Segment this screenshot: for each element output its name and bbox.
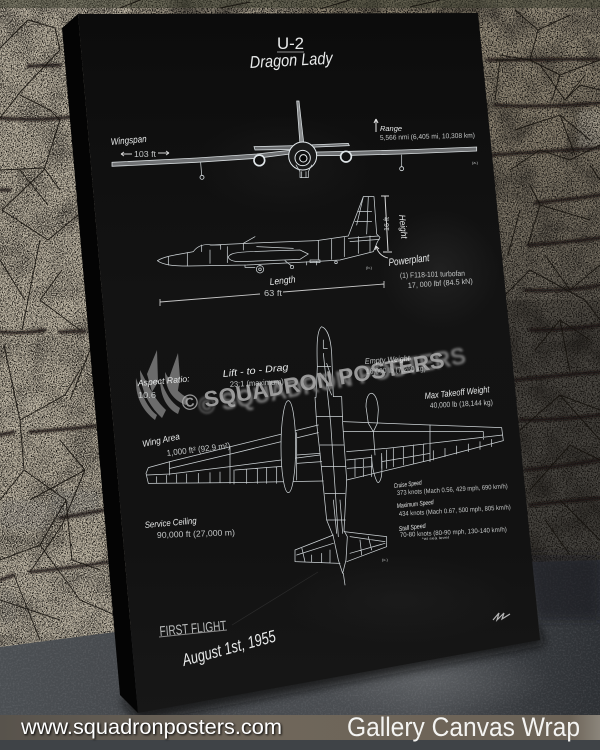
speed specs: 70-80 knots (80-90 mph, 130-140 km/h) [400, 526, 507, 539]
service ceiling spec: Service Ceiling [144, 515, 197, 530]
service ceiling spec: 90,000 ft (27,000 m) [157, 527, 235, 540]
figure labels: (a.) [472, 160, 479, 165]
aspect ratio spec: Aspect Ratio: [136, 373, 191, 388]
speed specs: Cruise Speed [393, 480, 422, 490]
range label: Range [380, 124, 402, 133]
height dimension: 16 ft [382, 216, 391, 231]
length dimension [160, 274, 384, 306]
max takeoff weight spec: Max Takeoff Weight [424, 384, 490, 401]
length dimension: 63 ft [264, 289, 283, 298]
canvas side edge [62, 14, 138, 713]
empty weight spec: Empty Weight [365, 354, 411, 366]
speed specs: Maximum Speed [396, 499, 434, 510]
title: Dragon Lady [249, 49, 334, 72]
watermark logo wings [136, 350, 188, 420]
powerplant label: 17, 000 lbf (84.5 kN) [408, 276, 473, 290]
canvas print [62, 13, 540, 713]
powerplant label: Powerplant [388, 252, 431, 269]
watermark main text: © SQUADRON POSTERS [180, 347, 446, 416]
floor [0, 560, 600, 750]
max takeoff weight spec [424, 384, 493, 410]
front view aircraft [112, 101, 477, 179]
website text: www.squadronposters.com [20, 716, 282, 739]
top view aircraft [146, 327, 503, 585]
speed specs: Stall Speed [398, 523, 426, 533]
figure labels: (c.) [382, 557, 388, 562]
empty weight spec: 16,000 lb (7,260 kg) [366, 364, 426, 376]
artist signature [493, 613, 510, 620]
footer band [0, 712, 600, 750]
max takeoff weight spec: 40,000 lb (18,144 kg) [430, 398, 493, 410]
length dimension: Length [269, 274, 296, 288]
range label [374, 119, 475, 142]
floor texture and light [0, 555, 600, 750]
product text: Gallery Canvas Wrap [347, 712, 580, 742]
speed specs: *at sea level [422, 536, 449, 541]
aspect ratio spec [136, 373, 191, 400]
lift to drag spec [222, 362, 290, 389]
lift to drag spec: 23:1 (maximum) [230, 377, 284, 389]
wingspan label: 103 ft [134, 150, 157, 159]
first flight label: FIRST FLIGHT [159, 617, 227, 639]
watermark ghost text: © SQUADRON POSTERS [196, 342, 468, 421]
wing area spec: 1,000 ft² (92.9 m²) [166, 440, 231, 458]
service ceiling spec [144, 515, 235, 540]
speed specs [393, 480, 511, 541]
canvas front face [78, 13, 540, 713]
side view aircraft [157, 197, 380, 273]
speed specs: 373 knots (Mach 0.56, 429 mph, 690 km/h) [397, 483, 508, 497]
height dimension [381, 196, 410, 252]
speed specs: 434 knots (Mach 0.67, 500 mph, 805 km/h) [399, 504, 511, 518]
wingspan label [110, 134, 169, 159]
aspect ratio spec: 10.6 [138, 391, 157, 400]
watermark [136, 342, 468, 421]
powerplant label: (1) F118-101 turbofan [400, 269, 465, 280]
title: U-2 [277, 34, 304, 53]
wing area spec [141, 431, 231, 458]
first flight label [159, 617, 278, 670]
range label: 5,566 nmi (6,405 mi, 10,308 km) [380, 133, 475, 142]
powerplant label [375, 246, 473, 290]
title [249, 34, 334, 72]
wing area spec: Wing Area [141, 431, 181, 449]
empty weight spec [365, 354, 426, 376]
lift to drag spec: Lift - to - Drag [222, 362, 290, 380]
figure labels: (b.) [366, 265, 373, 270]
chalk smudges [195, 115, 520, 645]
height dimension: Height [397, 214, 410, 240]
figure labels [366, 160, 479, 562]
first flight label: August 1st, 1955 [179, 627, 278, 670]
wingspan label: Wingspan [110, 134, 147, 148]
